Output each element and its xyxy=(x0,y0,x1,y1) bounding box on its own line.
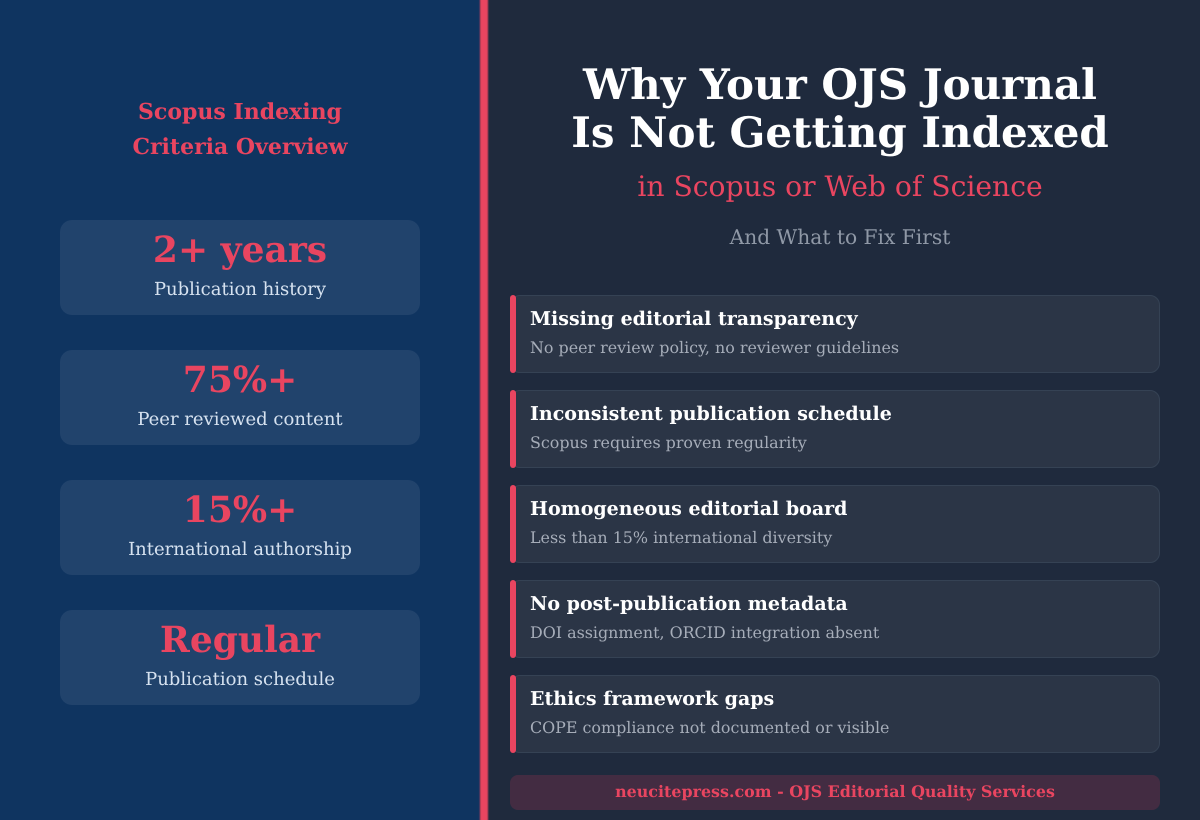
footer banner: neucitepress.com - OJS Editorial Quality Services xyxy=(615,782,1055,801)
stat card: international authorship xyxy=(60,480,420,575)
issue card: metadata: DOI assignment, ORCID integration absent xyxy=(530,623,879,642)
issue card: metadata xyxy=(510,580,1160,658)
issue card: publication schedule: Scopus requires proven regularity xyxy=(530,433,807,452)
stat card: peer reviewed content: Peer reviewed content xyxy=(137,409,343,430)
stat card: publication history xyxy=(60,220,420,315)
issue card: editorial transparency: Missing editorial transparency xyxy=(530,308,858,330)
issue card: editorial transparency xyxy=(510,295,1160,373)
stat card: international authorship: 15%+ xyxy=(183,489,297,531)
stat card: peer reviewed content: 75%+ xyxy=(183,359,297,401)
title: Is Not Getting Indexed xyxy=(571,108,1109,157)
issue card: metadata: No post-publication metadata xyxy=(530,593,848,615)
stat card: publication history: Publication history xyxy=(154,279,326,300)
stat card: publication history: 2+ years xyxy=(153,229,327,271)
issue card: ethics xyxy=(510,675,1160,753)
issue card: editorial board: Less than 15% international diversity xyxy=(530,528,832,547)
title: Why Your OJS Journal xyxy=(583,60,1097,109)
panel: right content xyxy=(484,0,1200,820)
issue card: publication schedule: Inconsistent publication schedule xyxy=(530,403,892,425)
subtitle: in Scopus or Web of Science xyxy=(637,170,1043,203)
stat card: peer reviewed content xyxy=(60,350,420,445)
panel: left sidebar xyxy=(0,0,480,820)
issue card: ethics: Ethics framework gaps xyxy=(530,688,774,710)
issue card: editorial board: Homogeneous editorial board xyxy=(530,498,847,520)
heading: Scopus criteria overview xyxy=(132,99,348,160)
stat card: international authorship: International authorship xyxy=(128,539,352,560)
heading: Scopus criteria overview: Scopus Indexing xyxy=(138,99,342,125)
title xyxy=(571,60,1109,157)
issue card: publication schedule xyxy=(510,390,1160,468)
accent divider xyxy=(480,0,488,820)
stat card: publication schedule: Regular xyxy=(160,619,320,661)
stat card: publication schedule: Publication schedule xyxy=(145,669,335,690)
issue card: ethics: COPE compliance not documented or visible xyxy=(530,718,889,737)
heading: Scopus criteria overview: Criteria Overview xyxy=(132,134,348,160)
footer banner xyxy=(510,775,1160,810)
tagline: And What to Fix First xyxy=(730,225,950,249)
issue card: editorial board xyxy=(510,485,1160,563)
issue card: editorial transparency: No peer review policy, no reviewer guidelines xyxy=(530,338,899,357)
stat card: publication schedule xyxy=(60,610,420,705)
